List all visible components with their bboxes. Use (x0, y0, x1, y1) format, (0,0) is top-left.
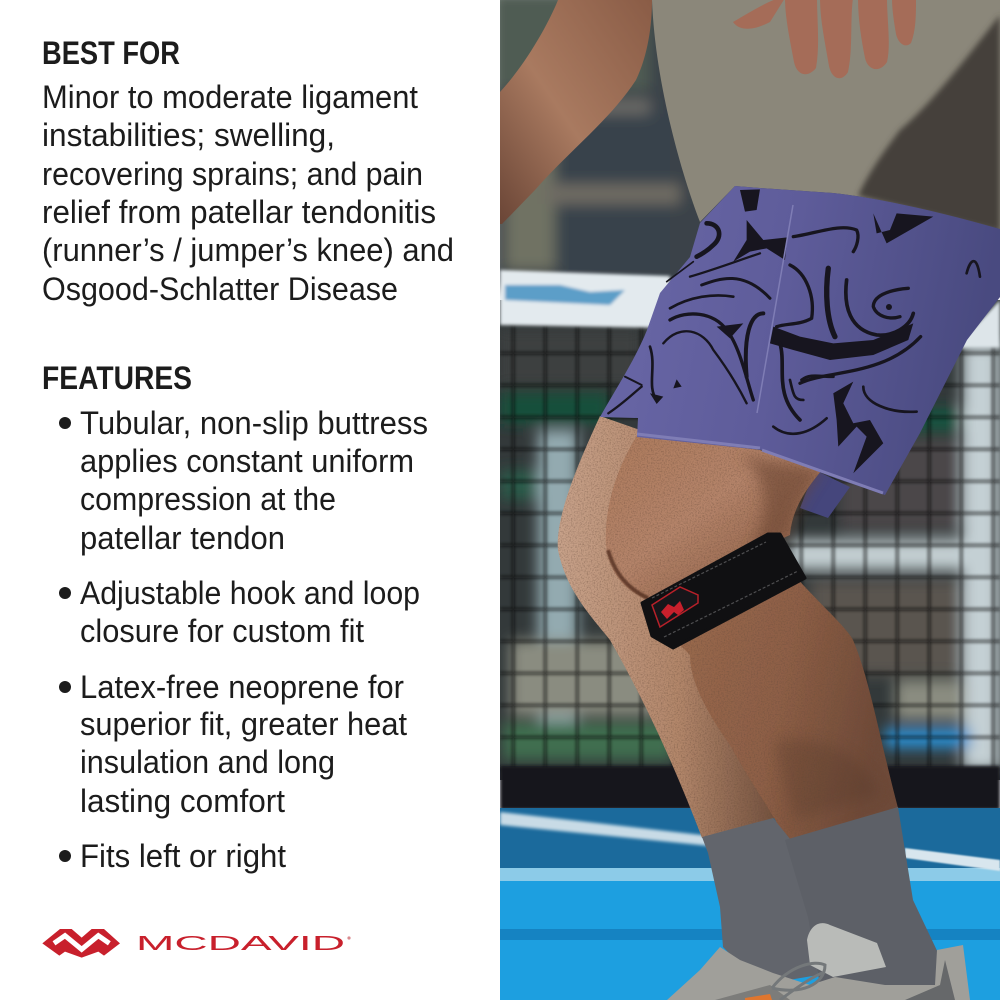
heading: best for: BEST FOR (42, 35, 180, 71)
subject: shirt shadow (858, 15, 1000, 232)
subject: socks (702, 807, 942, 990)
subject: shoes (667, 923, 970, 1000)
text block: best for description (42, 79, 454, 307)
feature: tubular buttress: applies constant uniform (80, 443, 414, 479)
subject: shirt (652, 0, 1000, 229)
shorts: hem (637, 434, 883, 493)
feature: latex-free neoprene: superior fit, greater heat (80, 706, 407, 742)
subject: calf shadow (777, 740, 864, 816)
shorts: dark marble swirl pattern (608, 189, 980, 473)
shorts: side seam (757, 205, 793, 413)
background: net court area (500, 300, 1000, 780)
background: blue court with white lines (500, 808, 1000, 1000)
feature: adjustable closure: Adjustable hook and loop (80, 575, 420, 611)
background: dark base of fence (500, 766, 1000, 810)
subject: rear leg shin (558, 416, 780, 838)
feature: adjustable closure: closure for custom fit (80, 613, 364, 649)
subject: raised arm (500, 0, 652, 224)
photo: man on pickleball court wearing knee strap (490, 0, 1000, 1000)
feature: latex-free neoprene: Latex-free neoprene for (80, 669, 404, 705)
feature: latex-free neoprene (59, 669, 407, 819)
background: blurred building (490, 0, 1000, 290)
strap: red logo patch (652, 587, 698, 627)
text block: best for description: relief from patellar tendonitis (42, 194, 436, 230)
feature: fits left or right: Fits left or right (80, 838, 286, 874)
text block: best for description: Osgood-Schlatter Disease (42, 271, 398, 307)
feature: tubular buttress: patellar tendon (80, 520, 285, 556)
feature: tubular buttress: compression at the (80, 481, 336, 517)
icon: McDavid emblem (42, 929, 120, 958)
feature: adjustable closure (59, 575, 420, 649)
knee strap (642, 534, 805, 648)
subject: thigh shadow under shorts (744, 452, 823, 540)
heading: features: FEATURES (42, 360, 192, 396)
subject: purple shorts (600, 186, 1000, 495)
subject: knee crease (608, 550, 648, 598)
text block: best for description: Minor to moderate ligament (42, 79, 418, 115)
feature: latex-free neoprene: lasting comfort (80, 783, 285, 819)
list: features (59, 405, 428, 874)
text block: best for description: recovering sprains; and pain (42, 156, 423, 192)
text block: best for description: (runner’s / jumper’s knee) and (42, 232, 454, 268)
feature: tubular buttress: Tubular, non-slip buttress (80, 405, 428, 441)
feature: tubular buttress (59, 405, 428, 556)
logo: McDavid (42, 929, 351, 958)
feature: latex-free neoprene: insulation and long (80, 744, 335, 780)
wordmark: MCDAVID (136, 933, 345, 955)
subject: hand on shirt (733, 0, 916, 78)
subject: front thigh and calf (606, 434, 898, 842)
text block: best for description: instabilities; swelling, (42, 117, 335, 153)
background: net top tape (500, 270, 1000, 348)
subject: rear shorts panel behind thigh (800, 470, 850, 518)
